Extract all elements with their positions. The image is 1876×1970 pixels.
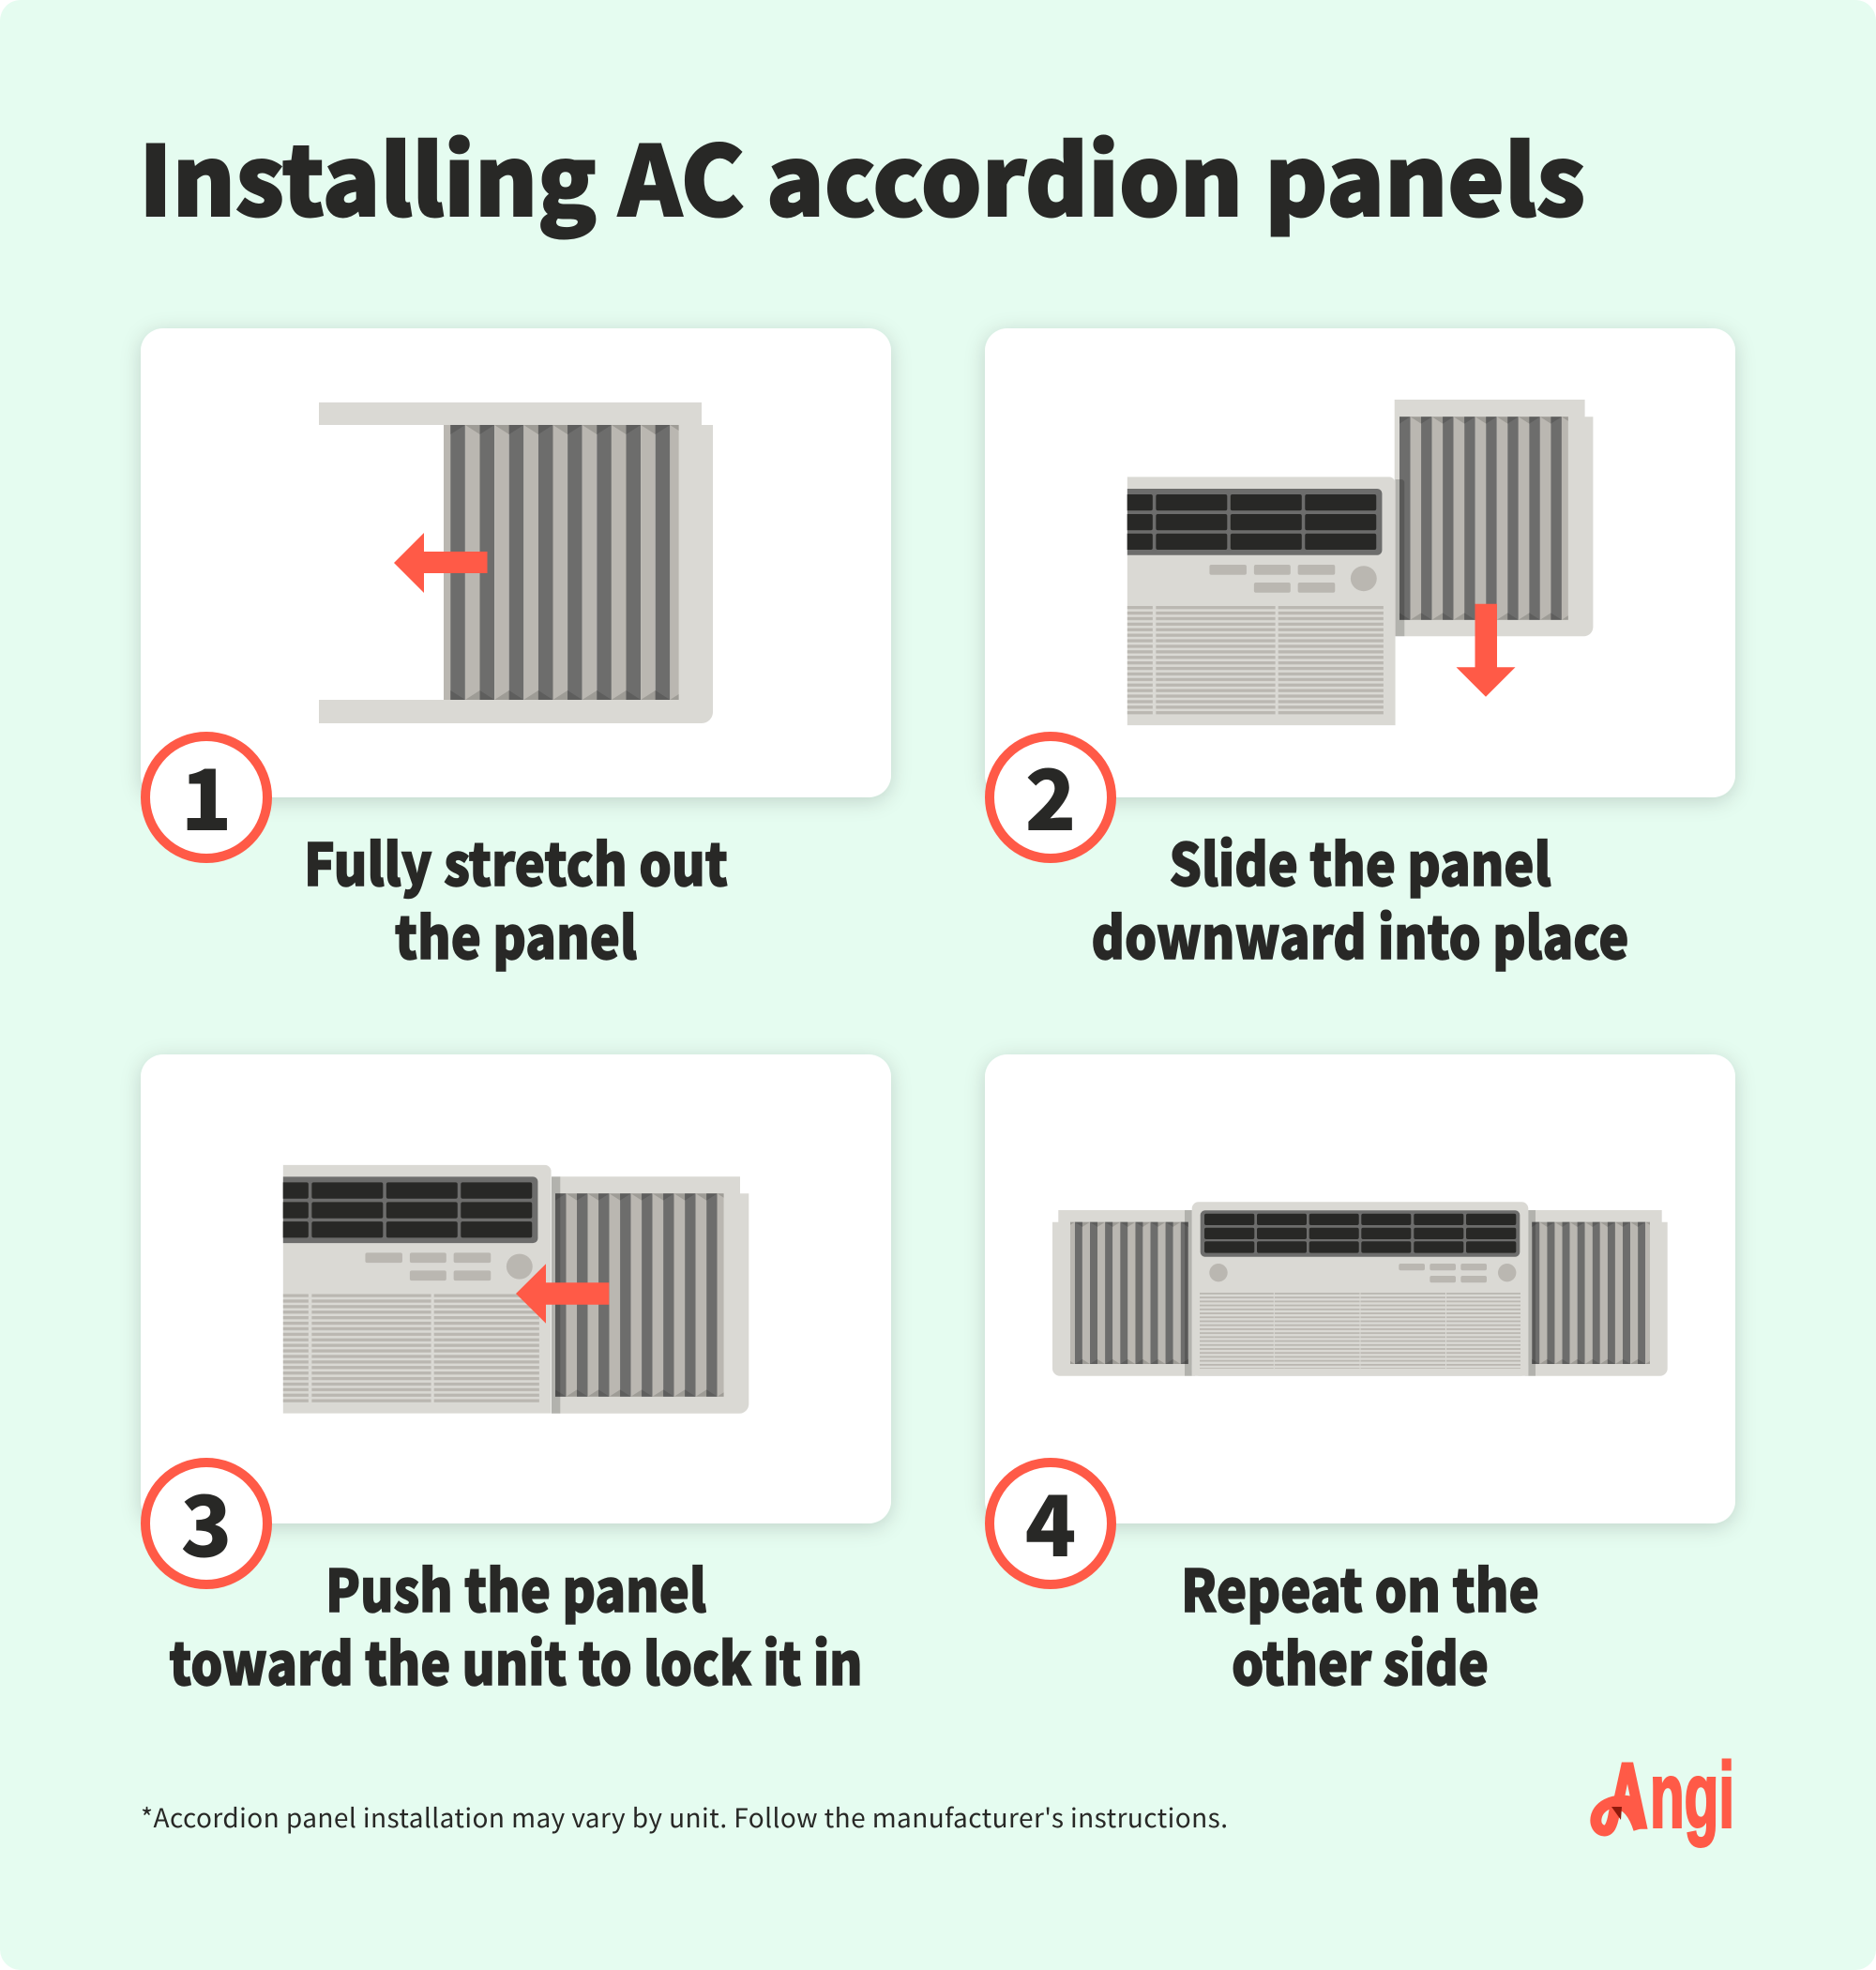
caption 4: other side xyxy=(1232,1617,1489,1702)
panel: step 4 xyxy=(985,1054,1735,1702)
step number 1 xyxy=(145,733,267,858)
step number 3 xyxy=(145,1459,267,1584)
illustration: AC unit with both panels xyxy=(1052,1202,1668,1376)
card 4 background xyxy=(985,1054,1735,1523)
step number 4 xyxy=(990,1459,1112,1584)
arrow: pointing down xyxy=(1456,604,1516,697)
caption 2: Slide the panel xyxy=(1169,818,1551,902)
arrow: pointing left xyxy=(394,533,488,593)
step number 4: 4 xyxy=(1025,1459,1076,1581)
caption 1 xyxy=(304,818,728,976)
caption 2 xyxy=(1092,818,1628,976)
card 3 background xyxy=(141,1054,891,1523)
caption 1: Fully stretch out xyxy=(304,818,728,902)
caption 3: toward the unit to lock it in xyxy=(169,1617,863,1702)
panel: step 1 xyxy=(141,328,891,976)
illustration: panel pushed toward unit xyxy=(280,1165,749,1414)
logo: Angi: A xyxy=(1608,1747,1647,1846)
step number 2: 2 xyxy=(1025,733,1076,855)
caption 2: downward into place xyxy=(1092,891,1628,976)
caption 3: Push the panel xyxy=(325,1544,706,1629)
step number 1: 1 xyxy=(181,733,232,855)
caption 3 xyxy=(169,1544,863,1702)
card 1 background xyxy=(141,328,891,797)
arrow: pointing left xyxy=(516,1264,609,1324)
illustration: stretched accordion panel xyxy=(319,402,713,723)
caption 1: the panel xyxy=(395,891,637,976)
title: Installing AC accordion panels xyxy=(139,104,1585,244)
footnote: *Accordion panel installation may vary by unit. Follow the manufacturer's instructions. xyxy=(141,1798,1228,1836)
step number 3: 3 xyxy=(181,1459,232,1581)
logo: Angi: ngi xyxy=(1650,1743,1734,1846)
panel: step 3 xyxy=(141,1054,891,1702)
logo: Angi xyxy=(1590,1758,1732,1848)
step number 2 xyxy=(990,733,1112,858)
illustration: panel beside AC unit xyxy=(1124,400,1593,725)
panel: step 2 xyxy=(985,328,1735,976)
caption 4 xyxy=(1181,1544,1539,1702)
card 2 background xyxy=(985,328,1735,797)
caption 4: Repeat on the xyxy=(1181,1544,1539,1629)
